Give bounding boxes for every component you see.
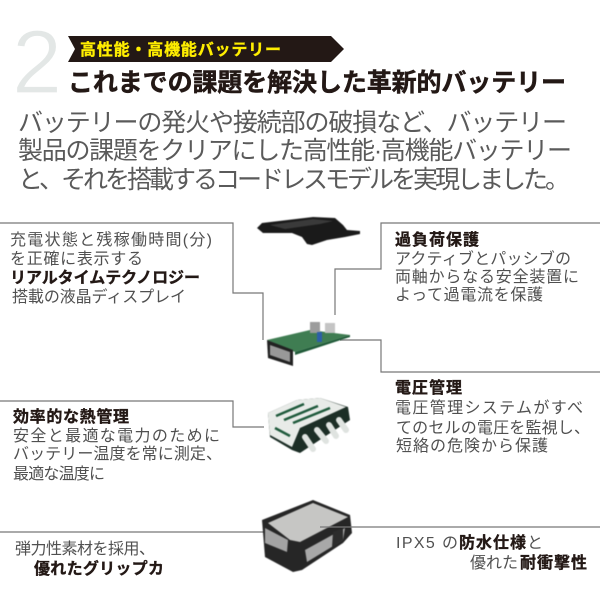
callout: overload protection: よって過電流を保護 [395, 286, 543, 304]
icon: battery case [262, 500, 352, 572]
callout: thermal management: 最適な温度に [13, 465, 105, 483]
callout: grip: 弾力性素材を採用、 [15, 540, 155, 558]
callout: overload protection: 両軸からなる安全装置に [395, 268, 579, 286]
ribbon heading: 高性能・高機能バッテリー [80, 40, 281, 59]
callout: waterproof and impact resistance: と [527, 535, 543, 552]
intro text: バッテリーの発火や接続部の破損など、バッテリー [18, 109, 567, 137]
callout: thermal management: 効率的な熱管理 [13, 407, 129, 426]
intro text [18, 109, 572, 194]
callout: waterproof and impact resistance: IPX5 の [396, 535, 458, 552]
callout: overload protection: 過負荷保護 [395, 230, 479, 249]
leader line: overload protection [335, 223, 600, 315]
intro text: と、それを搭載するコードレスモデルを実現しました。 [18, 166, 570, 194]
callout: voltage management: てのセルの電圧を監視し、 [396, 419, 590, 437]
callout: real-time display: を正確に表示する [10, 250, 143, 268]
callout: real-time display: 充電状態と残稼働時間(分) [10, 231, 212, 249]
leader line: waterproof [320, 526, 600, 528]
callout: overload protection: アクティブとパッシブの [395, 249, 571, 268]
callout: grip [15, 540, 164, 578]
callout: voltage management [395, 378, 590, 455]
callout: real-time display: リアルタイムテクノロジー [10, 269, 200, 287]
callout: waterproof and impact resistance: 優れた [470, 554, 518, 572]
callout: voltage management: 短絡の危険から保護 [396, 437, 548, 455]
callout: overload protection [395, 230, 579, 304]
icon: battery cells [268, 398, 350, 453]
leader line: grip [0, 531, 265, 533]
leader line: display [0, 223, 263, 340]
callout: voltage management: 電圧管理 [395, 378, 462, 397]
ribbon heading [68, 36, 344, 62]
leader line: thermal management [0, 401, 264, 427]
callout: thermal management: 安全と最適な電力のために [13, 427, 220, 445]
intro text: 製品の課題をクリアにした高性能·高機能バッテリー [18, 137, 572, 165]
callout: waterproof and impact resistance: 耐衝撃性 [520, 553, 587, 572]
icon: battery top cover [257, 217, 360, 245]
main title: これまでの課題を解決した革新的バッテリー [68, 69, 566, 97]
callout: voltage management: 電圧管理システムがすべ [395, 399, 583, 417]
callout: grip: 優れたグリップカ [34, 559, 164, 578]
callout: waterproof and impact resistance [396, 533, 587, 572]
callout: real-time display [10, 231, 212, 306]
callout: waterproof and impact resistance: 防水仕様 [459, 533, 526, 552]
section number 2: 2 [12, 13, 62, 113]
callout: thermal management: バッテリー温度を常に測定、 [13, 445, 222, 463]
leader line: voltage management [340, 340, 600, 372]
callout: thermal management [13, 407, 222, 483]
icon: circuit board [267, 322, 350, 366]
callout: real-time display: 搭載の液晶ディスプレイ [12, 287, 186, 306]
